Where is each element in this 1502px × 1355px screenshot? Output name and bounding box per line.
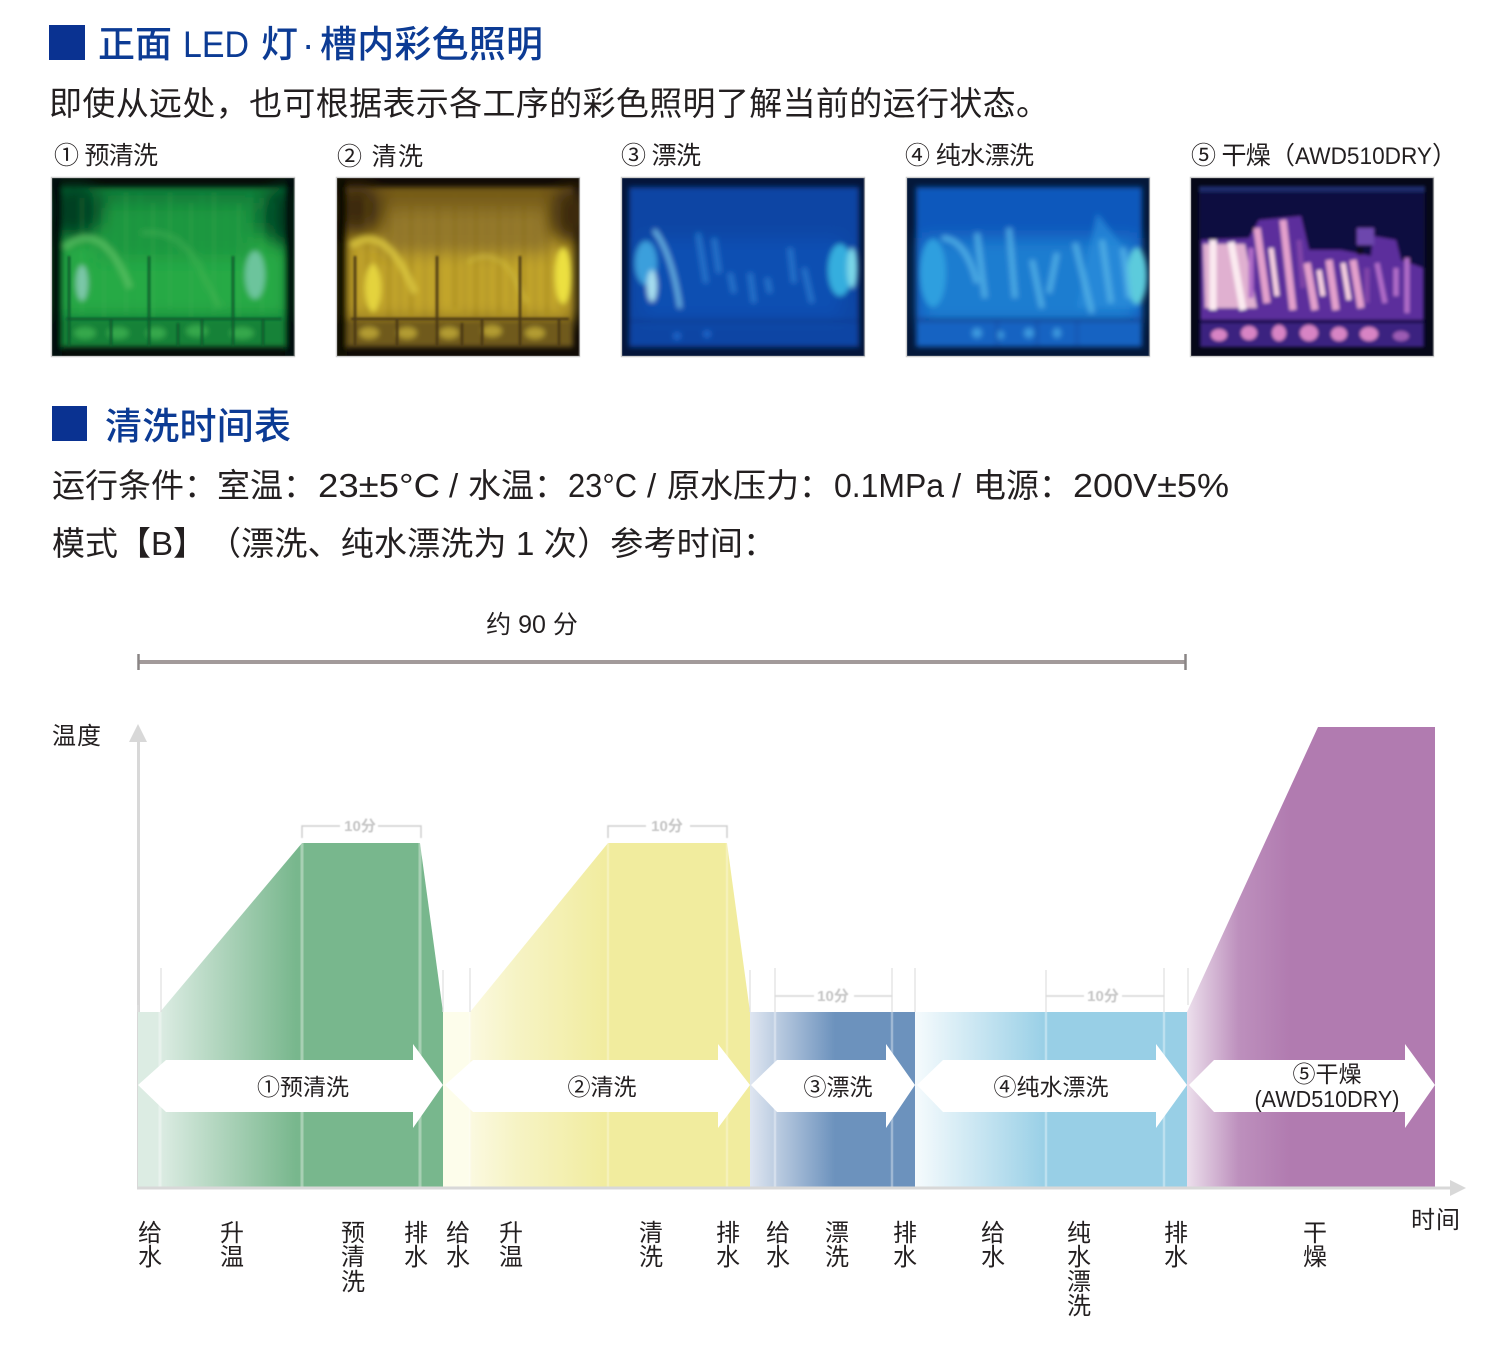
heading: LED lighting: LED xyxy=(183,24,249,65)
step: dry: 干 xyxy=(1303,1220,1327,1247)
text block: mode: （漂洗、纯水漂洗为 1 次）参考时间： xyxy=(208,525,776,562)
photo label 5: AWD510DRY xyxy=(1295,143,1432,170)
total duration label: 约 90 分 xyxy=(486,611,578,639)
photo: light blue pure water rinse lighting xyxy=(907,178,1150,356)
step: drain 2: 排 xyxy=(716,1220,740,1247)
arrow: rinse xyxy=(751,1044,915,1128)
step: rinse: 洗 xyxy=(825,1244,849,1271)
step: drain 4: 水 xyxy=(1164,1244,1188,1271)
arrow: wash xyxy=(445,1044,750,1128)
step: drain 2: 水 xyxy=(716,1244,740,1271)
step: water fill 2: 给 xyxy=(446,1220,470,1247)
area: drying xyxy=(1187,727,1435,1188)
photo label 2: ② 清洗 xyxy=(337,143,423,171)
text block: operating conditions: / xyxy=(449,467,459,504)
photo label 5: ⑤ 干燥（ xyxy=(1191,142,1295,170)
text block: operating conditions: 23±5°C xyxy=(318,467,440,504)
step: water fill 1: 水 xyxy=(138,1244,162,1271)
step: pure water rinse: 水 xyxy=(1067,1244,1091,1271)
step: heat 1: 温 xyxy=(220,1244,244,1271)
photo: green pre-wash lighting xyxy=(46,178,304,356)
step tick marks xyxy=(138,968,1188,1012)
text block: operating conditions xyxy=(52,467,1229,504)
area: pure water rinse xyxy=(915,1012,1187,1188)
step: pre-wash: 预 xyxy=(341,1220,365,1247)
text block: operating conditions: / xyxy=(647,467,657,504)
photo label 3: ③ 漂洗 xyxy=(621,142,701,170)
area: pre-wash xyxy=(138,843,443,1188)
text block: operating conditions: 200V±5% xyxy=(1073,467,1229,504)
total duration bar xyxy=(138,654,1186,670)
text block: operating conditions: 水温： xyxy=(468,467,567,504)
photo: blue rinse lighting xyxy=(622,178,865,356)
axis label: time: 时间 xyxy=(1411,1207,1460,1234)
step: pre-wash: 洗 xyxy=(341,1269,365,1296)
step: drain 1: 水 xyxy=(404,1244,428,1271)
arrow: pure water rinse xyxy=(917,1044,1187,1128)
step: drain 1: 排 xyxy=(404,1220,428,1247)
step: drain 3: 水 xyxy=(893,1244,917,1271)
step: water fill 2: 水 xyxy=(446,1244,470,1271)
duration marker: pre-wash: 10分 xyxy=(344,818,376,835)
step: pre-wash: 清 xyxy=(341,1244,365,1271)
step: pure water rinse: 纯 xyxy=(1067,1220,1091,1247)
step: drain 3: 排 xyxy=(893,1220,917,1247)
step labels xyxy=(138,1220,1327,1320)
text block: operating conditions: 原水压力： xyxy=(667,467,832,504)
text block: LED description: 即使从远处，也可根据表示各工序的彩色照明了解当前的运行状态。 xyxy=(49,85,1049,122)
photo: purple drying lighting xyxy=(1191,178,1434,356)
heading: LED lighting: 灯 xyxy=(261,24,298,65)
duration marker: wash: 10分 xyxy=(651,818,683,835)
text block: operating conditions: / xyxy=(952,467,962,504)
arrow: drying: ⑤干燥 xyxy=(1292,1061,1362,1087)
arrow: drying xyxy=(1189,1044,1435,1128)
area: rinse xyxy=(750,1012,915,1188)
photo label 5: ） xyxy=(1432,142,1457,170)
step: water fill 1: 给 xyxy=(138,1220,162,1247)
step: water fill 4: 水 xyxy=(981,1244,1005,1271)
photo frame edges xyxy=(52,178,1434,356)
axis: temperature xyxy=(129,724,147,1188)
step: pure water rinse: 洗 xyxy=(1067,1293,1091,1320)
duration marker: rinse: 10分 xyxy=(817,988,849,1005)
duration marker: rinse xyxy=(775,988,892,1005)
axis: time xyxy=(137,1180,1466,1196)
photo label 5 xyxy=(1191,142,1457,170)
text block: mode: 模式【B】 xyxy=(52,525,206,562)
duration marker: pure water rinse: 10分 xyxy=(1087,988,1119,1005)
duration marker: wash xyxy=(608,818,727,838)
heading: LED lighting: 正面 xyxy=(98,24,172,65)
temperature time chart xyxy=(52,723,1466,1234)
text block: operating conditions: 0.1MPa xyxy=(834,467,945,504)
duration marker: pre-wash xyxy=(302,818,421,838)
arrow: rinse: ③漂洗 xyxy=(804,1074,872,1100)
photo label 1: ① 预清洗 xyxy=(54,142,158,170)
step: heat 1: 升 xyxy=(220,1220,244,1247)
arrow: drying: (AWD510DRY) xyxy=(1254,1086,1400,1112)
arrow: pre-wash: ①预清洗 xyxy=(257,1074,349,1100)
photo: yellow wash lighting xyxy=(333,178,592,356)
heading: LED lighting: 槽内彩色照明 xyxy=(320,24,543,65)
step: water fill 3: 水 xyxy=(766,1244,790,1271)
heading: LED lighting: · xyxy=(302,24,314,65)
step: water fill 4: 给 xyxy=(981,1220,1005,1247)
text block: operating conditions: 23°C xyxy=(568,467,637,504)
step: dry: 燥 xyxy=(1303,1244,1327,1271)
step: water fill 3: 给 xyxy=(766,1220,790,1247)
step: heat 2: 升 xyxy=(499,1220,523,1247)
step: wash: 洗 xyxy=(639,1244,663,1271)
arrow: wash: ②清洗 xyxy=(568,1074,636,1100)
step: rinse: 漂 xyxy=(825,1220,849,1247)
duration marker: pure water rinse xyxy=(1046,988,1164,1005)
axis label: temperature: 温度 xyxy=(52,723,101,750)
heading: schedule: 清洗时间表 xyxy=(105,406,291,447)
step: pure water rinse: 漂 xyxy=(1067,1269,1091,1296)
step: drain 4: 排 xyxy=(1164,1220,1188,1247)
arrow: pre-wash xyxy=(138,1044,443,1128)
area: wash xyxy=(443,843,750,1188)
arrow: pure water rinse: ④纯水漂洗 xyxy=(994,1074,1108,1100)
photo label 4: ④ 纯水漂洗 xyxy=(905,142,1034,170)
text block: operating conditions: 运行条件：室温： xyxy=(52,467,316,504)
step: wash: 清 xyxy=(639,1220,663,1247)
text block: operating conditions: 电源： xyxy=(973,467,1072,504)
heading: LED lighting xyxy=(49,24,543,65)
step: heat 2: 温 xyxy=(499,1244,523,1271)
